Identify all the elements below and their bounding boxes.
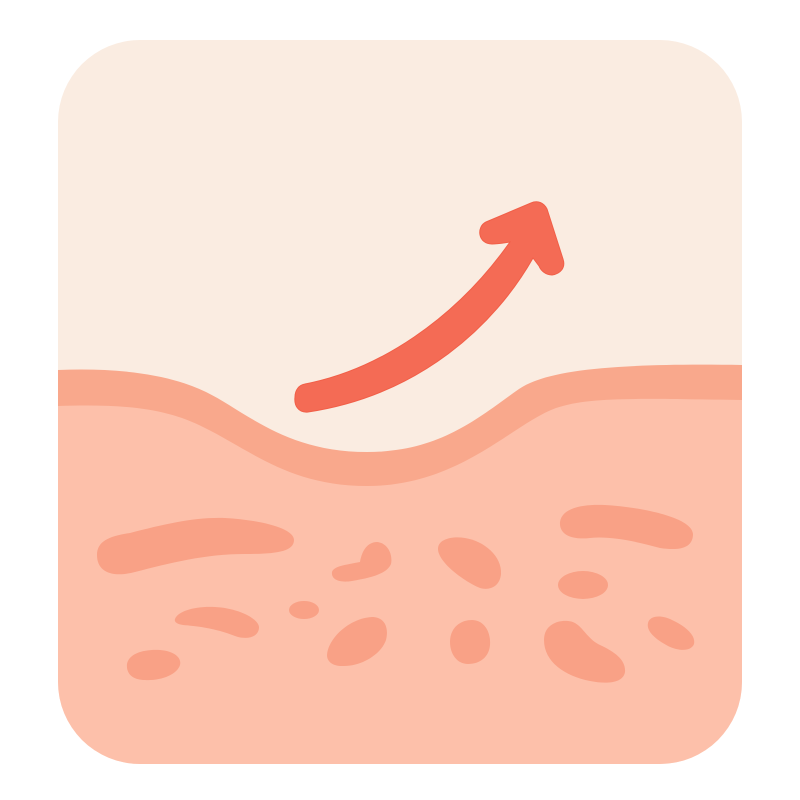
blob 8	[327, 617, 387, 666]
blob 7	[289, 601, 319, 619]
lower skin tissue layer	[58, 382, 742, 764]
blob 3	[438, 537, 501, 589]
blob 6	[175, 607, 259, 638]
blob group: dermal marks	[97, 505, 694, 683]
blob 5	[558, 571, 608, 599]
blob 11	[648, 617, 694, 650]
arrow: upward curved red arrow	[295, 202, 564, 412]
skin surface band	[58, 365, 742, 486]
blob 10	[544, 621, 625, 683]
blob 12	[127, 650, 180, 680]
blob 2	[332, 542, 391, 582]
panel: skin cross-section card	[58, 40, 742, 764]
blob 9	[450, 620, 490, 664]
blob 4	[560, 505, 693, 549]
upper background area	[58, 40, 742, 452]
blob 1	[97, 518, 294, 574]
